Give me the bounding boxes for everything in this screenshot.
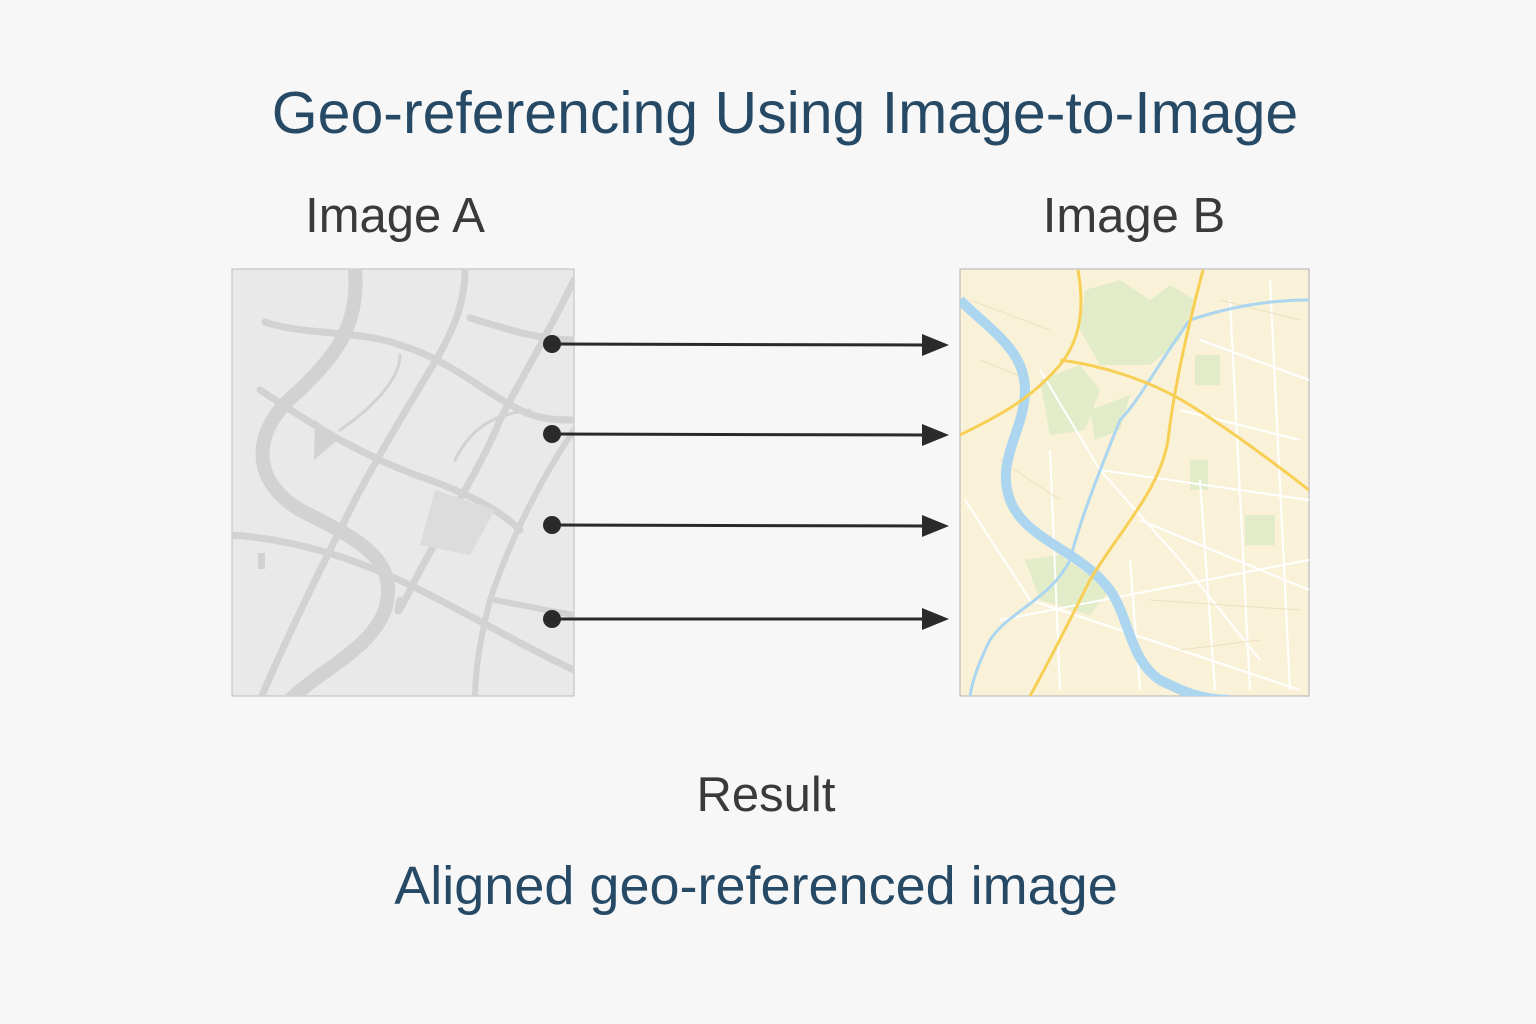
panel: image B colour map — [960, 269, 1309, 700]
label: Image B: Image B — [1043, 189, 1225, 243]
label: Result: Result — [697, 768, 835, 822]
label: Image A: Image A — [305, 189, 485, 243]
title: Geo-referencing Using Image-to-Image — [272, 80, 1298, 146]
arrows: control point links — [543, 334, 949, 630]
panel: image A grey map — [232, 269, 574, 700]
diagram — [232, 268, 1310, 696]
result text: Aligned geo-referenced image — [394, 856, 1118, 916]
